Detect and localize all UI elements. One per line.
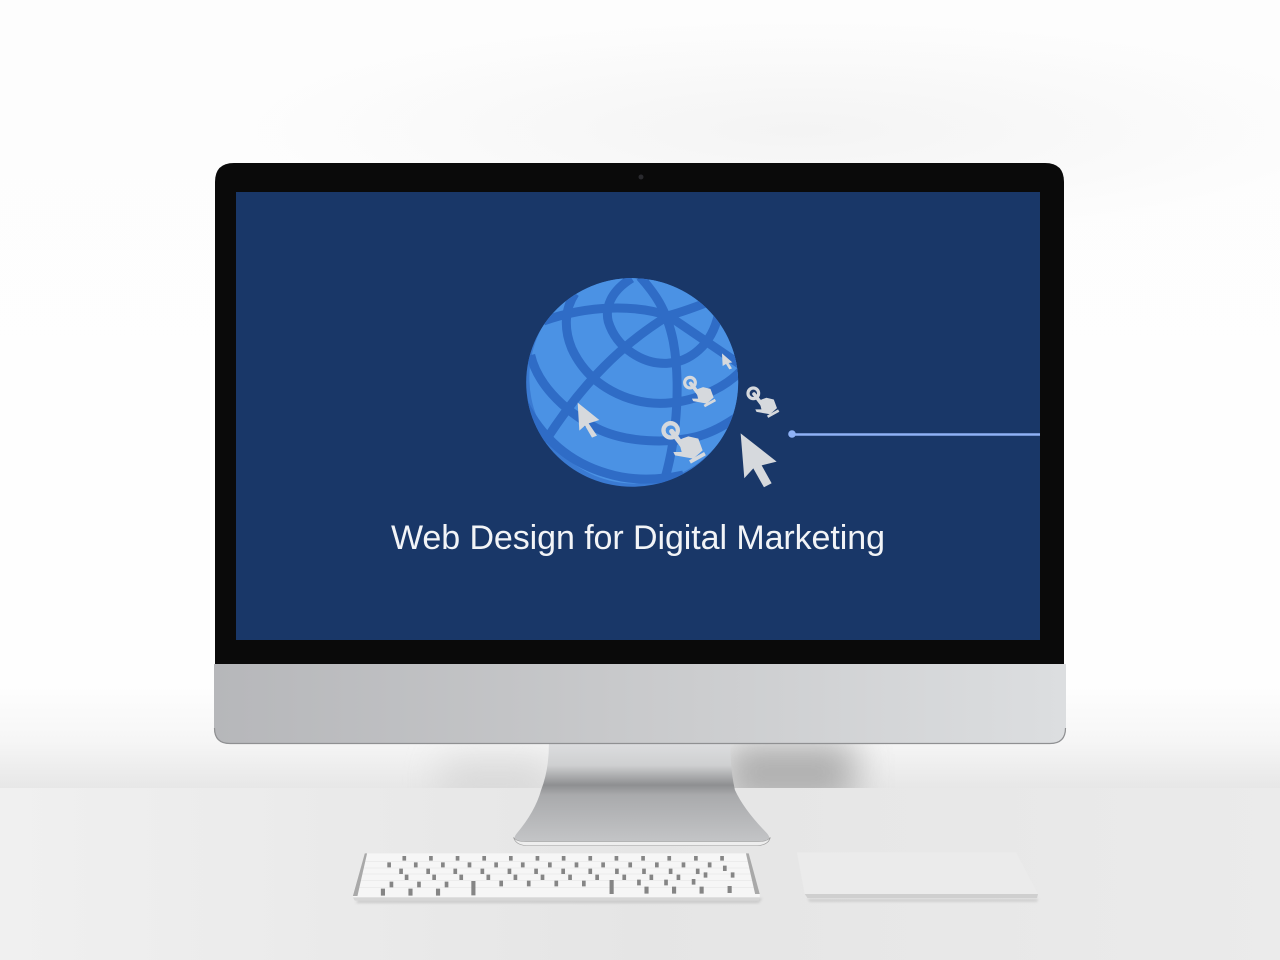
chin bottom edge xyxy=(214,728,1066,744)
soft wall shading above the monitor xyxy=(240,20,1280,240)
monitor chin xyxy=(214,664,1066,744)
icon: large arrow pointer xyxy=(741,433,777,487)
title: Web Design for Digital Marketing xyxy=(391,519,885,557)
icon: tap hand outside globe xyxy=(746,386,779,417)
stand neck and foot xyxy=(514,743,769,843)
wall shadow behind the monitor xyxy=(444,744,874,788)
globe xyxy=(523,272,743,487)
webcam xyxy=(638,174,644,180)
icon: small arrow pointer at top right of globe xyxy=(722,353,732,369)
screen xyxy=(236,192,1040,640)
globe with pointers xyxy=(523,272,779,487)
monitor stand xyxy=(514,743,770,846)
icon: arrow pointer on globe xyxy=(578,403,599,438)
icon: large tap hand on globe xyxy=(661,421,705,462)
desk surface xyxy=(0,788,1280,960)
connector line with dot xyxy=(788,430,1040,438)
icon: medium tap hand on globe xyxy=(683,376,715,406)
monitor bezel xyxy=(215,163,1064,664)
keyboard xyxy=(353,853,762,903)
stand foot lip xyxy=(514,837,770,846)
trackpad xyxy=(797,852,1038,902)
